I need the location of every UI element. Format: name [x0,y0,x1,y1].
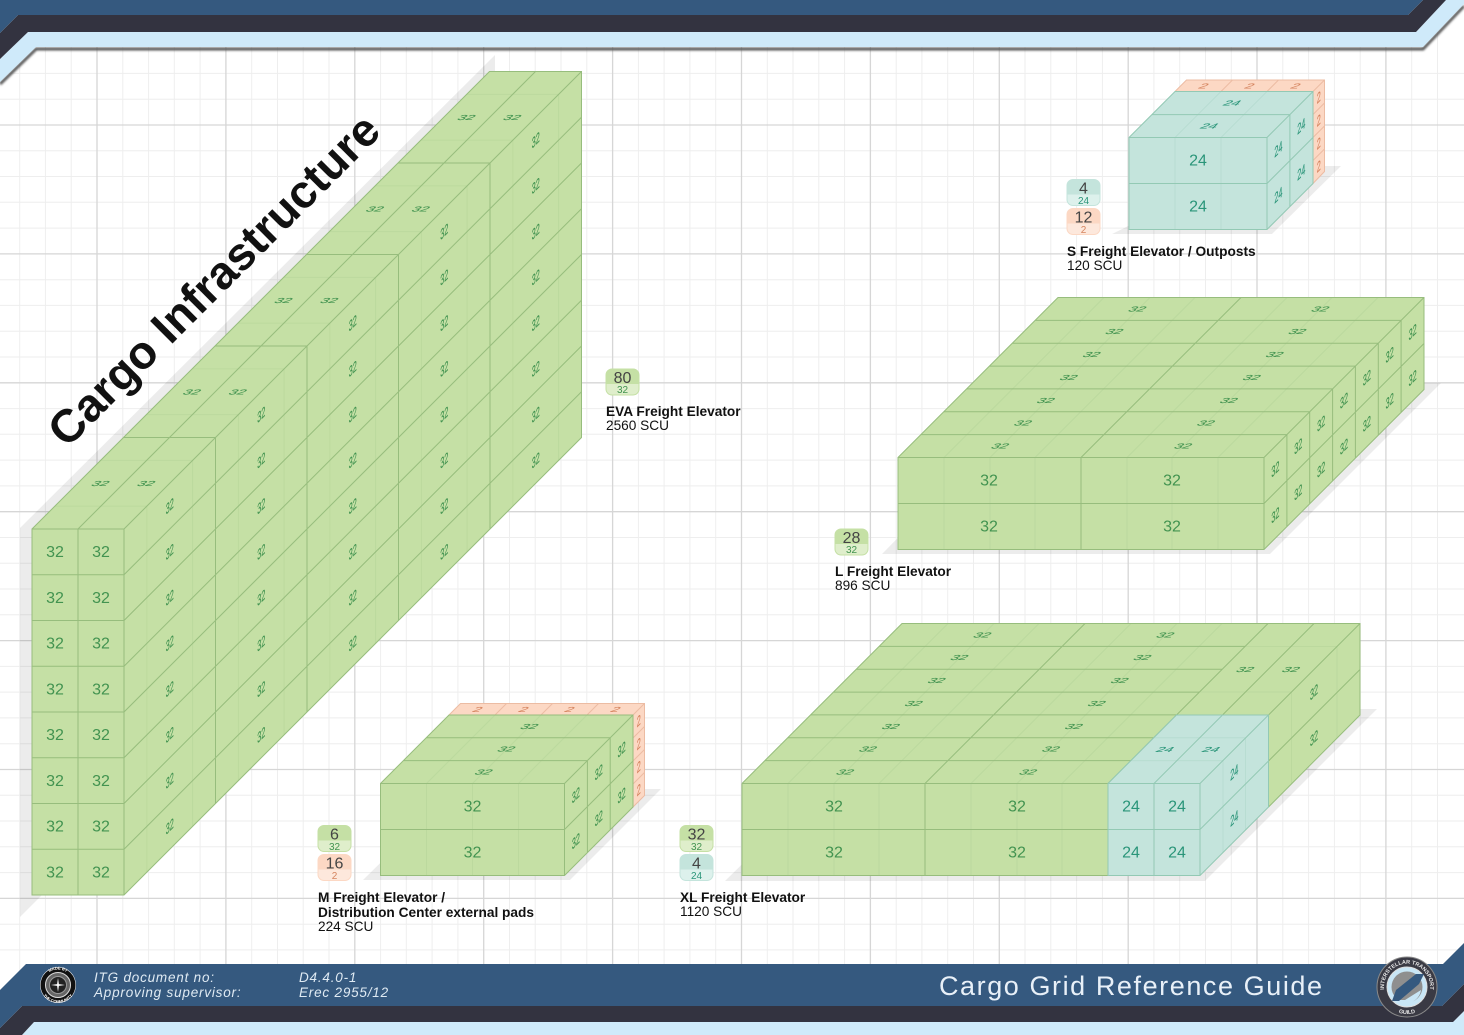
EVA side labels: 32 [166,815,174,839]
XL labels: 32 [1108,677,1132,685]
L side labels: 32 [1271,457,1279,481]
XL labels: 32 [1233,665,1257,673]
L floor shadow [882,383,1441,554]
EVA front labels: 32 [92,819,110,836]
L top labels: 32 [1034,396,1058,405]
EVA front labels: 32 [46,636,64,653]
XL labels: 32 [1008,845,1026,862]
S labels: 24 [1297,160,1305,185]
badge: 4 x 24: 4 [1079,180,1088,198]
XL labels: 32 [1062,722,1086,731]
XL labels: 32 [833,768,857,776]
L side labels: 32 [1271,503,1279,527]
caption: 224 SCU [318,919,373,934]
EVA side labels: 32 [440,311,448,335]
L top labels: 32 [1080,351,1104,359]
L top labels [988,305,1333,450]
XL labels: 24 [1199,745,1223,753]
badge: 6 x 32: 6 [330,826,339,844]
EVA side labels: 32 [257,540,265,564]
EVA side labels: 32 [532,174,540,198]
S labels: 2 [1317,157,1321,177]
badge: 12 x 2: 2 [1081,225,1087,236]
M labels: 2 [637,711,641,731]
EVA side labels: 32 [440,494,448,518]
M labels: 32 [595,806,603,831]
panel: M Freight Elevator stack [363,704,661,880]
EVA front labels: 32 [46,727,64,744]
S labels: 2 [1195,82,1212,90]
S faces [1129,80,1324,230]
EVA side labels: 32 [532,220,540,244]
XL teal faces [1108,715,1268,876]
M labels: 2 [607,705,624,713]
S labels: 24 [1220,99,1244,107]
legend: EVA Freight Elevator [606,369,741,433]
badge: 4 x 24 [1067,180,1100,207]
badge: 32 x 32: 32 [691,842,702,853]
XL labels: 32 [1310,726,1318,750]
EVA side labels: 32 [440,449,448,473]
M labels: 32 [595,760,603,785]
EVA side labels: 32 [440,403,448,427]
L side labels: 32 [1294,480,1302,505]
S labels: 24 [1274,183,1282,207]
EVA top labels: 32 [134,479,158,487]
footer document info: Approving supervisor: [93,985,241,1000]
XL labels: 32 [1153,631,1178,639]
caption: 1120 SCU [680,904,742,919]
caption: Distribution Center external pads [318,905,534,920]
footer document info: D4.4.0-1 [299,970,357,985]
EVA front labels [46,544,110,881]
EVA side labels: 32 [349,403,357,427]
EVA side labels: 32 [532,128,540,152]
EVA front labels: 32 [92,636,110,653]
EVA side labels: 32 [349,311,357,335]
badge: 4 x 24 [680,854,713,882]
caption: 896 SCU [835,578,890,593]
badge: 28 x 32: 32 [846,545,857,556]
EVA side labels: 32 [532,357,540,381]
footer document info [93,970,389,1000]
M labels: 2 [469,705,486,713]
panel: S Freight Elevator stack [1112,80,1341,234]
badge: 16 x 2: 16 [326,856,344,872]
EVA top labels: 32 [271,296,296,304]
L side labels: 32 [1409,320,1417,344]
EVA side labels: 32 [166,586,174,610]
EVA front labels: 32 [46,819,64,836]
L side labels: 32 [1340,389,1348,413]
EVA front labels: 32 [92,681,110,698]
EVA faces [32,72,582,895]
M labels: 32 [464,799,482,816]
badge: 80 x 32: 32 [617,385,628,396]
L top labels: 32 [1217,396,1241,405]
caption: S Freight Elevator / Outposts [1067,244,1256,259]
S labels: 2 [1317,134,1321,154]
L front labels: 32 [1163,519,1181,536]
title: Cargo Infrastructure [37,104,390,456]
footer document info: Erec 2955/12 [299,985,389,1000]
L top labels: 32 [1285,328,1310,336]
EVA front labels: 32 [46,681,64,698]
EVA side labels: 32 [532,266,540,290]
L top labels: 32 [1194,419,1218,427]
footer title: Cargo Grid Reference Guide [939,971,1322,1001]
S labels [1189,82,1321,216]
S floor shadow [1112,166,1341,234]
L top labels: 32 [1263,351,1287,359]
XL labels: 32 [1085,700,1109,708]
L side labels: 32 [1363,412,1371,436]
EVA top labels: 32 [409,205,433,213]
XL labels: 32 [947,654,972,662]
icon: Interstellar Transport Guild logo: GUILD [1399,1009,1415,1014]
EVA side labels: 32 [257,632,265,656]
EVA side labels: 32 [166,723,174,747]
EVA side labels: 32 [349,540,357,564]
M faces [380,704,644,876]
L top labels: 32 [1125,305,1150,313]
EVA side labels: 32 [349,449,357,473]
caption [835,564,952,593]
EVA side labels: 32 [257,723,265,747]
L top labels: 32 [988,442,1012,450]
S labels: 2 [1317,111,1321,131]
caption [606,404,741,433]
badge: 4 x 24: 24 [691,871,702,882]
XL labels: 32 [1016,768,1040,776]
XL labels: 24 [1168,799,1186,816]
EVA side labels: 32 [440,540,448,564]
icon: community emblem: THE COMMUNITY [44,994,72,1003]
EVA front labels: 32 [92,727,110,744]
panel: L Freight Elevator stack [882,298,1441,554]
EVA side labels: 32 [257,586,265,610]
M labels: 2 [637,734,641,754]
XL floor shadow [725,709,1377,881]
badge: 4 x 24: 4 [692,856,701,872]
EVA front labels: 32 [92,590,110,607]
badge: 16 x 2: 2 [332,871,338,882]
EVA top labels: 32 [180,388,204,396]
XL labels: 24 [1122,845,1140,862]
EVA top labels: 32 [226,388,250,396]
XL labels: 24 [1230,761,1238,785]
EVA side labels: 32 [166,540,174,564]
L top labels: 32 [1102,328,1127,336]
caption [318,890,534,934]
caption: M Freight Elevator / [318,890,445,905]
badge: 28 x 32 [835,529,868,556]
EVA side labels: 32 [166,632,174,656]
XL labels: 32 [1279,665,1303,673]
caption: XL Freight Elevator [680,890,806,905]
XL labels: 32 [879,722,903,731]
badge: 6 x 32: 32 [329,842,340,853]
L front labels: 32 [980,519,998,536]
M labels: 32 [517,722,542,731]
M labels: 32 [572,829,580,853]
L side labels: 32 [1340,435,1348,459]
EVA top labels: 32 [500,113,524,121]
EVA top labels: 32 [317,296,341,304]
legend: XL Freight Elevator [680,826,806,919]
M labels: 32 [464,845,482,862]
EVA top labels: 32 [454,113,479,121]
EVA side labels: 32 [166,769,174,793]
EVA front labels: 32 [46,590,64,607]
icon: Interstellar Transport Guild logo: INTERSTELLAR TRANSPORT [1380,960,1434,990]
EVA top labels: 32 [88,479,113,487]
XL labels: 32 [825,845,843,862]
EVA side labels: 32 [257,677,265,701]
EVA side labels: 32 [349,586,357,610]
badge: 12 x 2: 12 [1075,210,1092,226]
L side labels: 32 [1386,389,1394,413]
XL labels: 24 [1168,845,1186,862]
L side labels: 32 [1363,366,1371,390]
badge: 12 x 2 [1067,208,1100,236]
M labels: 32 [572,783,580,807]
badge: 32 x 32: 32 [688,826,706,844]
EVA side labels: 32 [349,632,357,656]
EVA top labels [88,113,524,487]
panel: EVA Freight Elevator stack [20,55,582,917]
M labels: 32 [472,768,496,776]
EVA front labels: 32 [46,773,64,790]
badge: 4 x 24: 24 [1078,196,1089,207]
M labels: 32 [494,745,519,753]
EVA top labels: 32 [363,205,387,213]
L side labels: 32 [1317,412,1325,436]
M labels: 32 [618,738,626,762]
legend: M Freight Elevator [318,826,534,934]
M labels: 2 [637,780,641,800]
icon: community emblem: MADE BY [48,966,68,972]
L top labels: 32 [1308,305,1333,313]
badge: 32 x 32 [680,826,713,853]
L front labels [980,473,1181,536]
L side labels: 32 [1294,434,1302,459]
icon: community emblem [40,966,76,1003]
EVA side labels: 32 [440,266,448,290]
EVA side labels: 32 [257,403,265,427]
XL labels: 32 [1008,799,1026,816]
caption [1067,244,1256,273]
badge: 16 x 2 [318,854,351,882]
caption: L Freight Elevator [835,564,952,579]
footer band [0,943,1464,1035]
legend: S Freight Elevator [1067,180,1256,273]
EVA front labels: 32 [92,864,110,881]
EVA side labels: 32 [532,449,540,473]
EVA side labels: 32 [166,494,174,518]
EVA side labels: 32 [440,220,448,244]
EVA side labels: 32 [440,357,448,381]
XL labels: 32 [856,745,880,753]
legend: L Freight Elevator [835,529,952,593]
S labels: 24 [1197,122,1221,130]
L top labels: 32 [1240,374,1264,382]
badge: 80 x 32 [606,369,639,396]
L side labels: 32 [1386,343,1394,367]
L side labels [1271,320,1417,527]
L faces [898,298,1424,550]
M labels: 2 [637,757,641,777]
EVA side labels: 32 [257,449,265,473]
caption: EVA Freight Elevator [606,404,741,419]
caption [680,890,806,919]
EVA floor shadow [20,55,495,917]
XL labels: 32 [1039,745,1063,753]
badge: 80 x 32: 80 [614,370,632,387]
XL labels: 32 [1310,680,1318,704]
EVA side labels: 32 [532,403,540,427]
badge: 28 x 32: 28 [843,530,860,547]
M floor shadow [363,789,661,880]
L top labels: 32 [1057,374,1081,382]
L top labels: 32 [1011,419,1035,427]
S labels: 24 [1297,114,1305,139]
header band [0,0,1464,84]
EVA front labels: 32 [92,773,110,790]
EVA front labels: 32 [46,544,64,561]
S labels: 2 [1241,82,1258,90]
S labels: 2 [1317,88,1321,108]
XL labels: 24 [1122,799,1140,816]
M labels: 2 [515,705,532,713]
XL labels: 24 [1153,745,1177,753]
S labels: 24 [1274,137,1282,161]
XL green faces [742,624,1360,876]
EVA side labels: 32 [349,357,357,381]
XL labels: 32 [925,677,949,685]
caption: 120 SCU [1067,258,1122,273]
XL labels [825,631,1318,862]
icon: Interstellar Transport Guild logo [1376,956,1438,1018]
XL labels: 32 [1130,654,1155,662]
L front labels: 32 [1163,473,1181,490]
footer document info: ITG document no: [94,970,215,985]
caption: 2560 SCU [606,418,669,433]
M labels: 2 [561,705,578,713]
EVA side labels: 32 [166,677,174,701]
XL labels: 32 [970,631,995,639]
EVA side labels: 32 [349,494,357,518]
EVA side labels: 32 [257,494,265,518]
M labels: 32 [618,784,626,808]
L top labels: 32 [1171,442,1195,450]
XL labels: 24 [1230,807,1238,831]
panel: XL Freight Elevator stack [725,624,1377,881]
L side labels: 32 [1409,366,1417,390]
XL labels: 32 [902,700,926,708]
EVA side labels: 32 [532,311,540,335]
XL labels: 32 [825,799,843,816]
L side labels: 32 [1317,458,1325,482]
EVA side labels [166,128,540,839]
badge: 6 x 32 [318,826,351,853]
S labels: 24 [1189,153,1207,170]
S labels: 2 [1287,82,1304,90]
S labels: 24 [1189,199,1207,216]
L front labels: 32 [980,473,998,490]
EVA front labels: 32 [92,544,110,561]
EVA front labels: 32 [46,864,64,881]
M labels [464,705,641,862]
